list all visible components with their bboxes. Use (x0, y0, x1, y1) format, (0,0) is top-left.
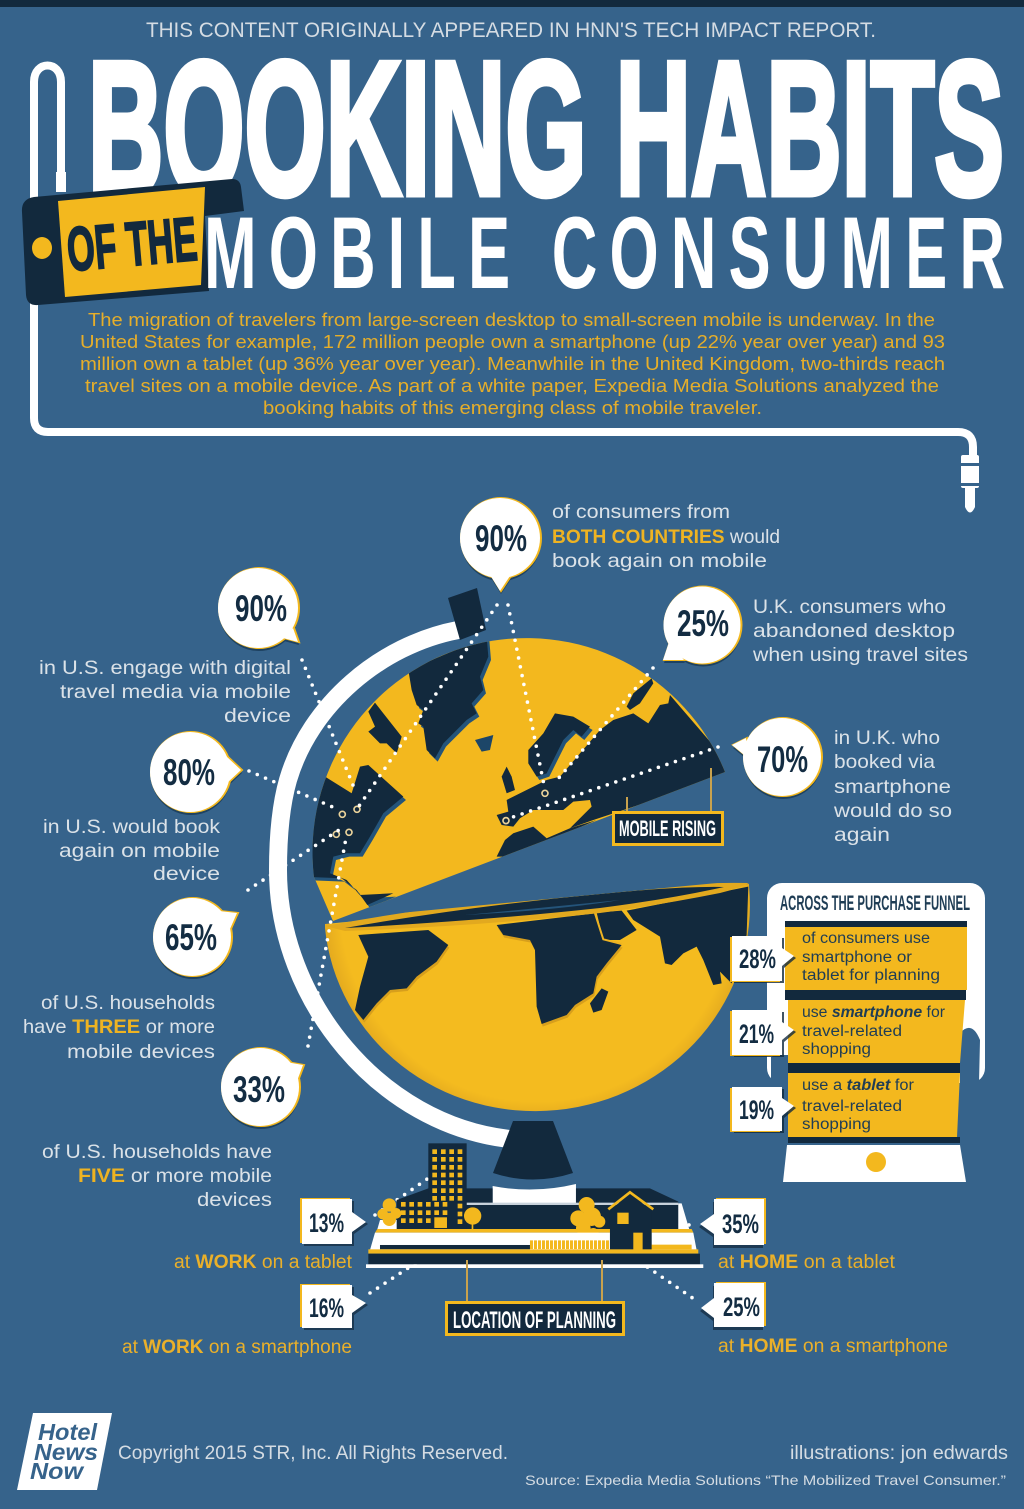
lower continents (325, 883, 749, 1027)
tablet screen (785, 921, 967, 1143)
tag: 19% (730, 1087, 796, 1133)
bubble: 80% U.S.: 80% (163, 752, 215, 793)
panel: across the purchase funnel (730, 883, 990, 1182)
tag: 13%: 13% (309, 1208, 344, 1238)
bubble: 70% U.K.: 70% (757, 739, 808, 780)
tag: 35% (699, 1198, 766, 1248)
intro paragraph: million own a tablet (up 36% year over year). Meanwhile in the United Kingdom, two-thirds reach (80, 354, 945, 374)
bubble: 65% households (153, 898, 238, 979)
icon: audio jack (961, 455, 979, 512)
city markers (333, 790, 548, 837)
text: both countries: of consumers from (552, 501, 730, 523)
trees (377, 1197, 693, 1249)
bubble: 25% U.K.: 25% (677, 603, 729, 644)
tag: 13% (300, 1198, 368, 1246)
tag: 25% (700, 1282, 766, 1330)
text: three devices: mobile devices (67, 1041, 215, 1063)
tag: 28% (730, 936, 796, 983)
intro paragraph (80, 310, 945, 418)
back building mass (397, 1188, 678, 1230)
text: three devices: have THREE or more (23, 1016, 215, 1038)
intro paragraph: travel sites on a mobile device. As part of a white paper, Expedia Media Solutions analyzed the (85, 376, 939, 396)
tag: 25%: 25% (723, 1292, 760, 1322)
text: U.K. abandoned: abandoned desktop (753, 620, 955, 642)
lawn (375, 1229, 693, 1233)
globe rim (325, 883, 749, 931)
text: U.S. book again (43, 816, 220, 885)
text: planning locations: at HOME on a tablet (718, 1252, 896, 1273)
intro paragraph: booking habits of this emerging class of mobile traveler. (263, 398, 762, 418)
text: planning locations: at HOME on a smartphone (718, 1336, 948, 1357)
tag: 28%: 28% (739, 944, 776, 974)
text: three devices: of U.S. households (41, 992, 215, 1014)
tablet hands (771, 1028, 990, 1150)
tag: 21%: 21% (739, 1019, 774, 1049)
text: three devices (23, 992, 215, 1063)
of the label: OF THE (64, 205, 200, 285)
bubble: 80% U.S. (150, 732, 242, 815)
bubble: 33% households: 33% (233, 1069, 285, 1110)
globe opening (345, 887, 724, 928)
cable plug (56, 172, 66, 192)
text: planning locations: at WORK on a tablet (174, 1252, 353, 1273)
funnel text: use a tablet for (802, 1077, 914, 1094)
funnel text: shopping (802, 1041, 871, 1058)
white ground band right (652, 1233, 697, 1250)
phone icon (22, 179, 244, 305)
logo: hotel news now: Hotel (38, 1419, 98, 1445)
intro paragraph: The migration of travelers from large-screen desktop to small-screen mobile is underway. In the (88, 310, 935, 330)
funnel text: smartphone or (802, 949, 912, 966)
label: mobile rising (614, 768, 722, 844)
text: U.S. digital: device (224, 705, 291, 727)
text: U.K. smartphone: smartphone (834, 776, 951, 798)
text: U.K. abandoned (752, 596, 968, 666)
label: location of planning (446, 1260, 624, 1334)
text: U.K. smartphone: booked via (834, 751, 935, 773)
text: U.S. book again: in U.S. would book (43, 816, 220, 838)
opening highlight (465, 900, 620, 915)
ground slope left (377, 1220, 397, 1232)
tag: 16% (300, 1284, 368, 1330)
charging cable (34, 66, 973, 460)
ring holder (448, 588, 486, 640)
illustrator credit: illustrations: jon edwards (790, 1442, 1008, 1464)
house (608, 1192, 653, 1250)
text: five devices: devices (197, 1189, 272, 1211)
tag: 21% (730, 1010, 796, 1057)
funnel text: travel-related (802, 1023, 902, 1040)
label: mobile rising: MOBILE RISING (619, 816, 716, 841)
upper continents (300, 637, 737, 908)
bubble: 65% households: 65% (165, 917, 217, 958)
tag: 16%: 16% (309, 1293, 344, 1323)
tag: 35%: 35% (722, 1209, 759, 1239)
funnel text (802, 930, 945, 1133)
bubble: 33% households (221, 1048, 304, 1129)
bubble: 90% U.S. digital: 90% (235, 588, 287, 629)
text: U.K. smartphone (833, 727, 952, 846)
phone screen (58, 187, 205, 297)
text: U.S. book again: again on mobile (59, 840, 220, 862)
funnel text: of consumers use (802, 930, 930, 947)
ground slope right (678, 1203, 690, 1232)
upper yellow cap (313, 638, 725, 921)
text: U.K. abandoned: U.K. consumers who (753, 596, 946, 618)
source note: THIS CONTENT ORIGINALLY APPEARED IN HNN'S TECH IMPACT REPORT. (146, 19, 876, 42)
phone body (22, 179, 244, 305)
phone button (32, 237, 52, 259)
text: U.K. abandoned: when using travel sites (752, 644, 968, 666)
tag: 19%: 19% (739, 1095, 774, 1125)
text: U.K. smartphone: would do so (833, 800, 952, 822)
office tower (401, 1143, 467, 1228)
text: five devices (42, 1141, 272, 1211)
top bar (0, 0, 1024, 7)
tablet body (767, 883, 985, 1083)
bubble: 70% U.K. (732, 718, 822, 799)
globe stand (493, 1121, 573, 1180)
logo: hotel news now (17, 1413, 112, 1490)
bubble: 90% U.S. digital (218, 568, 299, 651)
light roof line (467, 1203, 678, 1205)
text: five devices: of U.S. households have (42, 1141, 272, 1163)
logo: hotel news now: News (34, 1439, 98, 1465)
text: U.K. smartphone: in U.K. who (834, 727, 940, 749)
connector dotted lines (248, 605, 718, 1301)
label: location of planning: LOCATION OF PLANNING (453, 1307, 616, 1334)
text: both countries: BOTH COUNTRIES would (552, 526, 780, 548)
white ground band (370, 1233, 610, 1250)
text: U.S. digital (39, 657, 291, 727)
logo: hotel news now: Now (30, 1458, 85, 1484)
text: five devices: FIVE or more mobile (78, 1165, 272, 1187)
title: mobile consumer: MOBILE CONSUMER (204, 195, 1005, 310)
source line: Source: Expedia Media Solutions “The Mobilized Travel Consumer.” (525, 1472, 1006, 1488)
funnel text: shopping (802, 1116, 871, 1133)
tablet bottom (783, 1145, 966, 1182)
tablet button (866, 1152, 886, 1172)
text: planning locations (122, 1252, 948, 1358)
text: U.S. digital: in U.S. engage with digital (39, 657, 291, 679)
yellow hedge (530, 1232, 630, 1258)
lower yellow bowl (325, 884, 750, 1111)
text: U.S. book again: device (153, 863, 220, 885)
funnel text: travel-related (802, 1098, 902, 1115)
funnel text: tablet for planning (802, 967, 940, 984)
illustration: city and home base (366, 1143, 703, 1268)
globe lower half (17, 498, 1008, 1490)
dark hedge (380, 1245, 530, 1249)
text: both countries (552, 501, 780, 572)
intro paragraph: United States for example, 172 million people own a smartphone (up 22% year over year) and 93 (80, 332, 945, 352)
road (368, 1249, 698, 1254)
bubble: 90% both countries (460, 498, 541, 594)
text: planning locations: at WORK on a smartphone (122, 1337, 352, 1358)
text: U.S. digital: travel media via mobile (60, 681, 291, 703)
globe meridian ring (278, 630, 510, 1139)
bubble: 90% both countries: 90% (475, 518, 527, 559)
base white plinth (493, 1184, 576, 1205)
text: U.K. smartphone: again (834, 824, 890, 846)
globe upper half (300, 637, 737, 921)
copyright: Copyright 2015 STR, Inc. All Rights Reserved. (118, 1442, 508, 1464)
bubble: 25% U.K. (663, 586, 742, 666)
funnel text: use smartphone for (802, 1004, 945, 1021)
text: both countries: book again on mobile (552, 550, 767, 572)
middle navy block (467, 1205, 678, 1230)
